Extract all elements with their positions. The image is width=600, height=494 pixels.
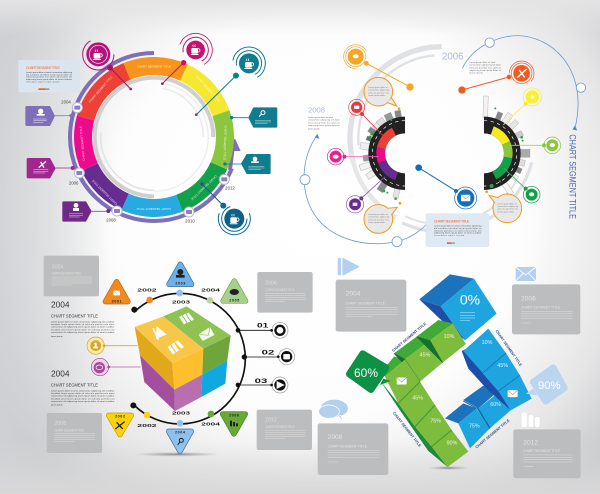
speech bubble right: Lorem ipsum dolor sit [497,202,517,205]
thin blue arc 2006 [462,36,586,130]
tag: purple [25,106,73,126]
segment labels: CHART SEGMENT TITLE [195,74,221,103]
purple outer arrow arc [45,28,263,246]
vertical title: CHART SEGMENT TITLE [567,134,577,219]
timeline labels: 2003 [172,410,190,416]
blue lower blocks [445,386,511,448]
year text 2008 [308,106,340,130]
colour ring segments [60,43,248,231]
buildings left [359,110,402,198]
trees left [368,119,397,200]
grey box 2012: CHART SEGMENT TITLE [523,449,561,453]
text block 1: 2004 [51,300,70,310]
grey box 2012: 2012 [265,418,277,424]
callout: bottom [426,213,489,247]
callout: chart segment title: elit curabitur tincidunt lorem ipsum dolor sit [26,73,72,76]
top cube 0% [419,274,497,340]
triangle 2002 [109,414,131,435]
callout: bottom: vehicula porttitor nisi amet consectetur elit [434,229,482,232]
bubble: light green [511,137,561,154]
triangle 2005 [223,281,246,302]
triangle 2006: 2006 [229,413,239,417]
text block 2: tincidunt lorem ipsum dolor sit vehicula porttitor nisi amet [51,392,115,395]
year markers: 2004 [61,100,71,105]
tag: dark purple [62,201,110,222]
bubble: yellow [503,88,541,125]
timeline labels [137,287,220,429]
timeline labels: 2002 [137,423,157,429]
blue lower blocks: 75% [469,423,480,429]
black circle timeline [88,266,272,451]
text block 1: Lorem ipsum dolor sit amet consectetur adipiscing elit curabitur [51,320,115,323]
callout: bottom: elit curabitur tincidunt lorem ipsum dolor sit [434,227,482,230]
inner grey arcs [91,74,217,200]
text block 2: tincidunt amet lorem ipsum dolor sit vehicula porttitor nisi [51,397,115,400]
icon: speech bubbles [319,399,348,421]
year text 2006: vehicula porttitor nisi amet sit [469,66,501,69]
rotated labels: CHART SEGMENT TITLE [475,418,511,449]
triangle 2001 [105,282,128,303]
triangle 2004: 2004 [175,431,186,435]
text block 2: consectetur elit adipiscing lorem ipsum dolor sit amet curabitur [51,395,115,398]
triangle 2004 [169,431,191,451]
year text 2006: lorem ipsum [469,72,483,75]
grey box 2008 [47,413,102,453]
year text 2008: vehicula porttitor nisi amet sit [308,121,340,124]
text block 2 [51,369,115,407]
text block 1: tincidunt amet lorem ipsum dolor sit vehicula porttitor nisi [51,328,115,331]
trees right [490,107,524,188]
callout: chart segment title: vehicula porttitor nisi amet consectetur elit [26,76,72,79]
text block 2: CHART SEGMENT TITLE [51,383,99,389]
text block 1 [51,300,115,338]
segment labels [79,65,228,211]
green lower blocks: 90% [447,440,458,446]
speech bubble top [364,77,400,110]
year markers: 2006 [69,180,79,185]
icon: teal cup [195,44,268,116]
grey box 2008: 2008 [328,434,343,441]
icon: envelope [516,267,536,281]
segment labels: CHART SEGMENT TITLE [91,179,118,206]
text block 1: lorem ipsum [51,335,63,338]
panel: cube diagram [44,256,313,457]
numbered markers [238,322,295,393]
grey box 2004 [336,280,406,332]
text block 1: consectetur elit adipiscing lorem ipsum dolor sit amet curabitur [51,331,115,334]
segment labels: CHART SEGMENT TITLE [190,174,218,201]
year text 2006: consectetur adipiscing elit dolor [469,64,501,67]
speech bubble bottom: lorem ipsum dolor [368,222,385,224]
bubble: orange-red plane [458,61,534,94]
text block 1: consectetur elit adipiscing lorem ipsum dolor sit amet curabitur [51,326,115,329]
grey box 2006: CHART SEGMENT TITLE [521,305,561,309]
pale background arcs [316,13,567,264]
timeline labels: 2002 [137,287,157,293]
numbered markers: 03 [255,378,268,385]
year text 2006: adipiscing lorem ipsum dolor sit [469,69,501,72]
rotated labels: CHART SEGMENT TITLE [391,321,428,353]
bubble: green [504,168,540,203]
timeline labels: 2004 [201,421,220,427]
blue side blocks [462,329,532,410]
speech bubble top: consectetur adipiscing [368,89,389,92]
callout: chart segment title: CHART SEGMENT TITLE [26,66,61,70]
panel: isometric blocks [318,258,581,478]
grey box 2004: 2004 [346,291,361,298]
numbered markers: 02 [262,350,275,357]
speech bubble right: consectetur adipiscing [497,205,518,208]
grey box 2012: CHART SEGMENT TITLE [265,425,296,429]
top cube 0%: 0% [460,292,480,308]
road left [368,117,436,190]
icon: crimson cup 1 [83,39,132,90]
grey box 2012 [513,429,581,478]
year text 2006 [442,52,501,75]
callout: bottom: adipiscing lorem ipsum dolor sit amet curabitur [434,232,482,235]
grey box 2004: 2004 [52,264,64,270]
year text 2008: 2008 [308,106,325,115]
segment labels: CHART SEGMENT TITLE [88,75,113,104]
year markers: 2010 [185,219,195,224]
year text 2008: lorem ipsum [308,127,320,130]
speech bubble bottom [364,202,401,233]
grey box 2012 [257,410,312,450]
green lower blocks [380,359,468,467]
triangle 2005: 2005 [229,298,239,302]
callout: 90%: 90% [538,380,561,392]
grey box 2006 [512,284,580,334]
grey box 2012: 2012 [523,439,538,446]
timeline labels: 2004 [201,288,220,294]
text block 2: consectetur elit adipiscing lorem ipsum dolor sit amet curabitur [51,400,115,403]
callout: bottom: tincidunt amet lorem [434,234,464,237]
segment labels: CHART SEGMENT TITLE [137,207,171,211]
segment labels: CHART SEGMENT TITLE [137,65,171,69]
callout: chart segment title: adipiscing lorem ipsum dolor sit amet curabitur [26,78,72,81]
grey box 2006: 2006 [265,281,277,287]
icon: bars [522,413,540,427]
text block 1: tincidunt lorem ipsum dolor sit vehicula porttitor nisi amet [51,323,115,326]
speech bubble right: vehicula porttitor nisi [497,208,519,211]
speech bubble bottom: Lorem ipsum dolor sit [368,213,388,216]
grey box 2006: 2006 [521,295,536,302]
callout: chart segment title: tincidunt amet lorem ipsum [26,80,60,83]
rotated labels: CHART SEGMENT TITLE [392,411,422,448]
buildings right [483,96,530,196]
rotated labels: CHART SEGMENT TITLE [494,329,523,368]
speech bubble right: lorem ipsum dolor [497,211,514,213]
speech bubble bottom: consectetur adipiscing [368,216,389,219]
triangle 2003: 2003 [175,282,185,286]
grey box 2008: CHART SEGMENT TITLE [328,444,368,448]
icon: play [338,258,359,275]
callout: 60%: 60% [354,366,378,380]
callout: chart segment title: Lorem ipsum dolor sit amet consectetur adipiscing [26,71,72,74]
callout: 60% [349,354,391,390]
year text 2008: Lorem ipsum dolor sit amet [308,116,333,119]
year markers: 2012 [225,186,235,191]
icon: crimson cup 2 [161,29,217,85]
grey box 2004: CHART SEGMENT TITLE [346,301,386,305]
text block 2: lorem ipsum [51,404,63,407]
icon: blue cup [200,182,255,239]
blue side blocks: 10% [482,340,493,346]
bubble: pink [327,148,378,165]
grey box 2008: 2008 [54,421,66,427]
grey box 2004: CHART SEGMENT TITLE [52,272,82,276]
road right [452,117,521,190]
speech bubble top: vehicula porttitor nisi [368,91,390,94]
speech bubble right [485,190,522,223]
shadow [428,466,469,470]
grey box 2006: CHART SEGMENT TITLE [265,288,296,292]
text block 2: 2004 [51,369,70,379]
green lower blocks: 75% [430,419,441,425]
green lower blocks: 45% [412,396,423,402]
blue side blocks: 45% [497,363,508,369]
text block 1: CHART SEGMENT TITLE [51,314,99,320]
year text 2006: 2006 [442,52,463,63]
year markers: 2008 [106,218,116,223]
blue lower blocks: 60% [490,402,501,408]
segment labels: CHART SEGMENT TITLE [222,125,228,160]
thin blue arc 2008 [300,134,432,247]
callout: bottom: CHART SEGMENT TITLE [434,219,470,224]
grey box 2008: CHART SEGMENT TITLE [54,428,85,432]
year text 2008: consectetur adipiscing elit dolor [308,119,340,122]
tag: magenta [27,158,75,178]
numbered markers: 01 [257,322,269,329]
bubble: red [349,99,387,140]
speech bubble top: lorem ipsum dolor [368,95,385,97]
triangle 2006 [223,413,245,434]
triangle 2002: 2002 [115,414,125,418]
green top blocks: 45% [420,353,431,359]
text block 2: Lorem ipsum dolor sit amet consectetur adipiscing elit curabitur [51,389,115,392]
callout: chart segment title [18,60,80,92]
triangle 2003 [169,264,192,286]
tag: teal top [230,107,277,128]
year text 2008: adipiscing lorem ipsum dolor sit [308,124,340,127]
triangle 2001: 2001 [112,299,122,303]
year text 2006: Lorem ipsum dolor sit amet [469,61,496,64]
timeline labels: 2003 [172,300,190,306]
bubble: purple [346,177,385,213]
panel: circular timeline [18,28,277,246]
grey box 2008 [318,423,388,475]
grey box 2006 [257,272,313,313]
speech bubble top: Lorem ipsum dolor sit [368,86,388,89]
rotated labels [391,321,523,449]
green top blocks [382,320,466,382]
year markers [61,100,235,224]
tag: teal lower [223,154,271,174]
bubble: blue mail [415,164,477,209]
left icons [87,337,141,376]
grey box 2004 [44,256,99,296]
shadow [133,452,220,457]
panel: road semicircles [300,13,586,264]
cube [135,306,231,411]
segment labels: CHART SEGMENT TITLE [79,126,86,161]
bubble: orange [344,45,414,91]
callout: bottom: Lorem ipsum dolor sit amet consectetur adipiscing [434,225,481,228]
speech bubble bottom: vehicula porttitor nisi [368,218,390,221]
green top blocks: 10% [444,334,455,340]
callout: 90% [526,368,564,401]
